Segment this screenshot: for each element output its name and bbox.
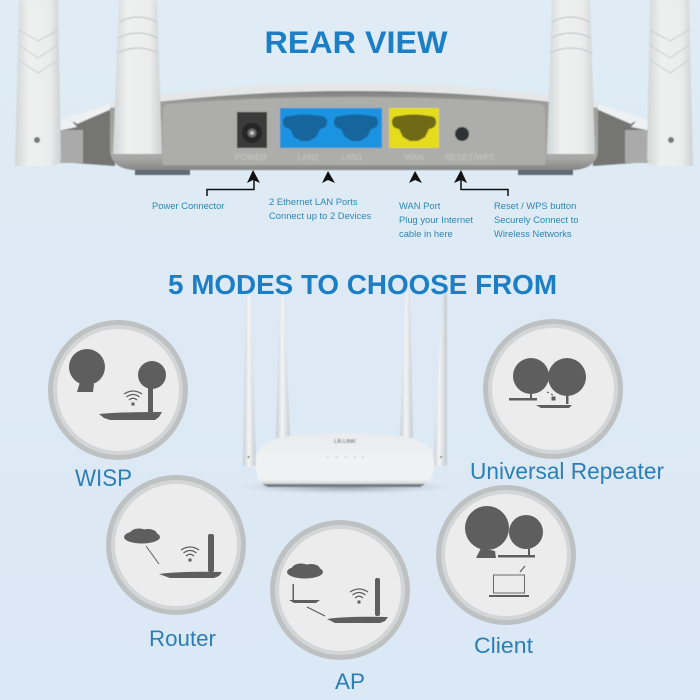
right inner antenna	[547, 0, 595, 154]
icon: repeater balloons	[509, 358, 586, 408]
caption: LAN ports: Connect up to 2 Devices	[269, 210, 371, 221]
panel: AP	[270, 520, 410, 660]
icon: WISP balloon and router	[69, 349, 166, 420]
panel: Universal Repeater	[483, 319, 623, 459]
caption: reset button: Wireless Networks	[494, 228, 572, 239]
icon: AP cloud and routers	[287, 564, 388, 623]
caption: LAN ports: 2 Ethernet LAN Ports	[269, 196, 358, 207]
router rear body	[110, 91, 598, 170]
right outer antenna	[647, 0, 693, 166]
router right wing	[593, 103, 652, 166]
LAN ports	[280, 108, 382, 148]
WAN port	[389, 108, 439, 148]
port labels: WAN	[404, 152, 424, 162]
caption: WAN port: Plug your Internet	[399, 214, 473, 225]
icon: client balloons and laptop	[465, 506, 543, 597]
arrow: power	[207, 170, 260, 196]
port labels: LAN2	[297, 152, 319, 162]
left outer antenna	[15, 0, 61, 166]
rubber feet	[135, 170, 573, 175]
port labels: LAN1	[341, 152, 363, 162]
caption: reset button: Securely Connect to	[494, 214, 578, 225]
reset button	[455, 127, 469, 141]
caption: WAN port: cable in here	[399, 228, 453, 239]
left inner antenna	[113, 0, 162, 154]
center router photo: LB-LINK	[334, 439, 356, 445]
port labels: POWER	[235, 152, 267, 162]
caption: power connector: Power Connector	[152, 200, 224, 211]
caption: WAN port: WAN Port	[399, 200, 441, 211]
router top rim	[110, 83, 598, 112]
port labels: RESET/WPS	[445, 152, 495, 162]
port labels	[235, 152, 495, 162]
power port	[237, 112, 267, 148]
panel: Router	[106, 475, 246, 615]
panel: WISP	[48, 320, 188, 460]
caption: reset button: Reset / WPS button	[494, 200, 576, 211]
rear view router	[15, 0, 693, 175]
label: Router: Router	[149, 626, 216, 651]
title: modes: 5 MODES TO CHOOSE FROM	[168, 269, 557, 300]
label: Client: Client	[474, 633, 533, 658]
title: rear view: REAR VIEW	[264, 24, 448, 60]
arrow: reset	[454, 170, 508, 196]
label: WISP: WISP	[75, 465, 132, 492]
label: Universal Repeater: Universal Repeater	[470, 458, 664, 484]
router left wing	[56, 103, 115, 166]
icon: Router cloud and router	[124, 528, 222, 578]
arrow: WAN	[409, 171, 422, 183]
arrow: LAN	[322, 171, 335, 183]
panel: Client	[436, 485, 576, 625]
center router photo	[240, 293, 450, 494]
router rear inner panel	[163, 97, 545, 165]
label: AP: AP	[335, 669, 365, 694]
